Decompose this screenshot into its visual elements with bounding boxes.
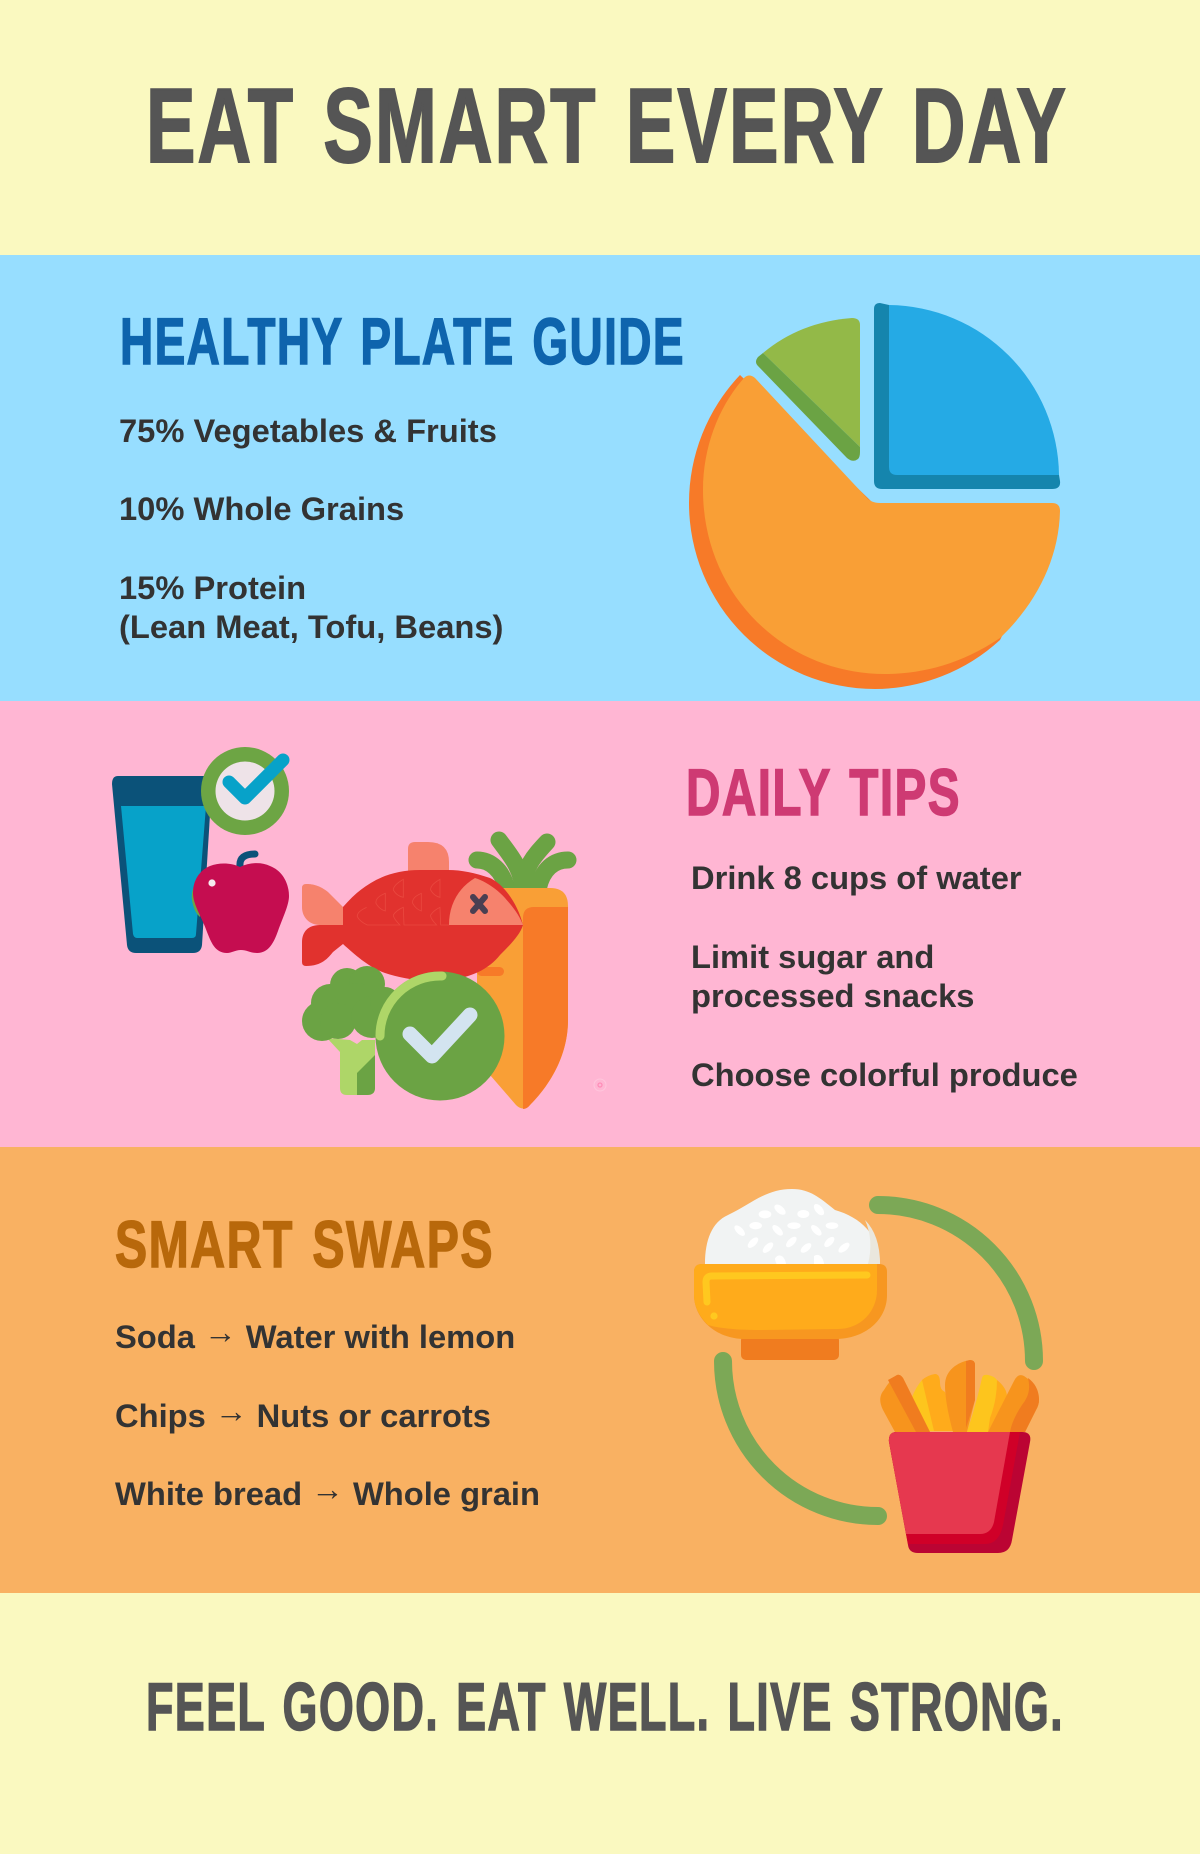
daily tips list [691, 859, 1078, 1093]
panel: smart swaps [0, 1147, 1200, 1593]
icon: rice bowl [694, 1189, 887, 1360]
small dot [594, 1079, 606, 1091]
swaps list: → [204, 1313, 237, 1350]
header banner [0, 0, 1200, 255]
icon: broccoli [302, 966, 400, 1095]
daily tips list: Limit sugar and [691, 938, 934, 975]
pie chart icon [689, 303, 1060, 689]
heading: healthy plate guide: HEALTHY PLATE GUIDE [120, 304, 685, 378]
swaps list: Soda [115, 1318, 195, 1355]
heading: smart swaps: SMART SWAPS [115, 1207, 494, 1281]
panel: daily tips [0, 701, 1200, 1147]
swaps list: Whole grain [353, 1475, 540, 1512]
icon: glass of water [112, 776, 212, 953]
daily tips list: processed snacks [691, 977, 974, 1014]
plate guide list [119, 412, 503, 645]
daily tips list: Choose colorful produce [691, 1056, 1078, 1093]
icon: green check circle [376, 972, 504, 1100]
swaps list: → [311, 1470, 344, 1507]
plate guide list: 15% Protein [119, 569, 306, 606]
daily tips list: Drink 8 cups of water [691, 859, 1022, 896]
swaps list: → [215, 1392, 248, 1429]
swaps list [115, 1313, 540, 1512]
heading: daily tips: DAILY TIPS [686, 755, 961, 829]
plate guide list: 10% Whole Grains [119, 490, 404, 527]
footer banner [0, 1593, 1200, 1854]
arrow: fries to rice [723, 1361, 878, 1516]
plate guide list: (Lean Meat, Tofu, Beans) [119, 608, 503, 645]
icon: apple [192, 854, 289, 953]
icon: fish [302, 842, 523, 981]
icon: french fries [880, 1360, 1039, 1553]
icon: check badge [201, 747, 289, 835]
swaps list: Nuts or carrots [257, 1397, 491, 1434]
plate guide list: 75% Vegetables & Fruits [119, 412, 497, 449]
swaps list: Water with lemon [246, 1318, 515, 1355]
panel: healthy plate guide [0, 255, 1200, 701]
swaps list: Chips [115, 1397, 206, 1434]
icon: carrot [477, 840, 568, 1109]
arrow: rice to fries [878, 1205, 1034, 1361]
swaps list: White bread [115, 1475, 302, 1512]
